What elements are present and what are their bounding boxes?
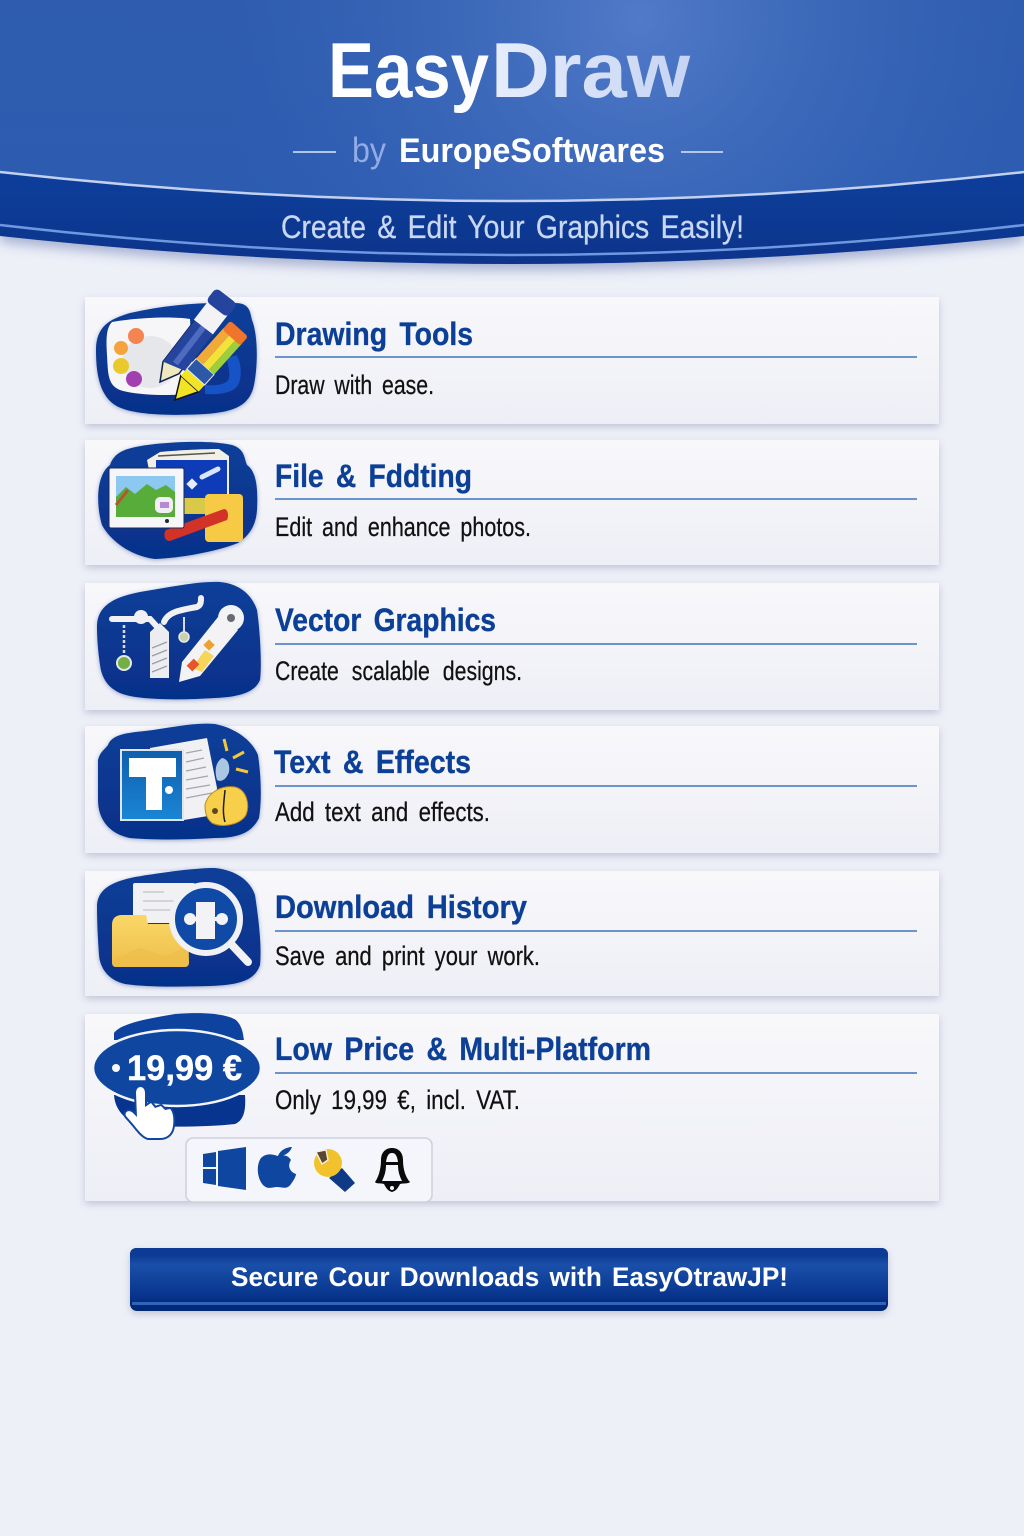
panel: download history: [85, 868, 939, 996]
heading: Vector Graphics: [275, 602, 496, 638]
heading: Download History: [275, 889, 527, 925]
tagline: Create & Edit Your Graphics Easily!: [281, 209, 744, 245]
panel: file and editing: [85, 440, 939, 565]
panel: text and effects: [85, 724, 939, 853]
byline: [293, 131, 723, 170]
description: Create scalable designs.: [275, 656, 522, 686]
icon: folder and magnifier: [97, 868, 261, 987]
button label: Secure Cour Downloads with EasyOtrawJP!: [231, 1262, 788, 1292]
card: [85, 1014, 939, 1201]
header banner: [0, 0, 1024, 264]
icon: apple: [258, 1147, 296, 1188]
icon: bell: [375, 1148, 410, 1192]
panel: drawing tools: [85, 288, 939, 424]
description: Draw with ease.: [275, 370, 434, 400]
icon: windows: [203, 1147, 246, 1190]
icon: photos: [98, 442, 257, 559]
ribbon top line: [0, 172, 1024, 201]
heading: Low Price & Multi-Platform: [275, 1031, 651, 1067]
panel: low price and multi-platform: [85, 1013, 939, 1202]
icon: palette and pencils: [96, 288, 257, 415]
header sky: [0, 0, 1024, 201]
description: Save and print your work.: [275, 941, 540, 971]
title: [328, 26, 690, 114]
ribbon band: [0, 172, 1024, 264]
icon: flashlight: [314, 1149, 355, 1192]
title: Draw: [491, 26, 690, 114]
ribbon bottom line: [0, 225, 1024, 255]
call-to-action button: [130, 1248, 888, 1311]
icon: text tool: [98, 724, 261, 840]
card: [85, 583, 939, 710]
heading: Text & Effects: [274, 744, 471, 780]
heading: Drawing Tools: [275, 316, 473, 352]
description: Edit and enhance photos.: [275, 512, 531, 542]
byline: by: [352, 131, 386, 170]
description: Add text and effects.: [275, 797, 490, 827]
heading: File & Fddting: [275, 458, 472, 494]
description: Only 19,99 €, incl. VAT.: [275, 1085, 520, 1115]
card: [85, 871, 939, 996]
icon: price tag: [93, 1013, 261, 1138]
card: [85, 297, 939, 424]
price: 19,99 €: [127, 1049, 242, 1088]
panel: vector graphics: [85, 582, 939, 710]
card: [85, 440, 939, 565]
icon: vector tools: [97, 582, 261, 699]
card: [85, 726, 939, 853]
icon: hand cursor: [126, 1087, 173, 1138]
title: Easy: [328, 26, 489, 114]
byline: EuropeSoftwares: [399, 132, 665, 170]
platform icons box: [186, 1138, 432, 1202]
